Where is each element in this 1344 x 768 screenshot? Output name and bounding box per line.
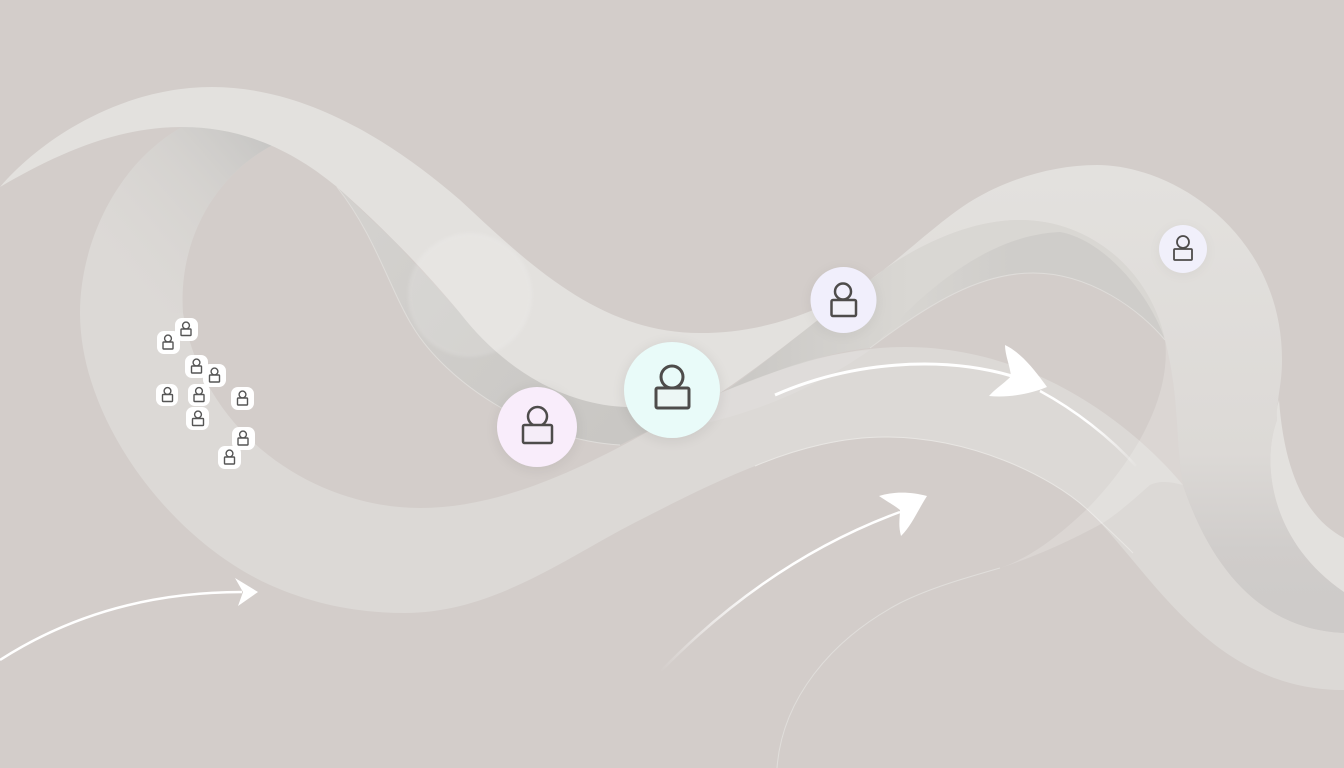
tile 7 [231,387,254,410]
ribbon: right side fold [1270,400,1344,592]
ribbon: lower right wedge with thin outline [777,340,1183,768]
node: small lavender person [1159,225,1207,275]
tile 9 [232,427,255,450]
tile 5 [156,384,178,406]
ribbon: loop from upper left to lower right [80,127,1344,690]
cluster of small person tiles [156,318,255,469]
arrow: upper right with tail continuing [775,345,1136,466]
ribbon: upper sweep, right arc [870,165,1344,633]
tile 8 [186,407,209,430]
tile 1 [175,318,198,341]
tile 2 [157,331,180,354]
node: pink person [497,387,577,469]
node: lavender person [810,267,876,335]
ribbon: back bands behind the right arc [720,220,1165,395]
ribbon: shadow wedge under the upper ribbon [337,187,720,445]
tile 3 [185,355,208,378]
soft orb on the ribbon [408,233,532,357]
tile 6 [188,384,210,406]
tile 4 [203,364,226,387]
tile 10 [218,446,241,469]
ribbon: upper sweep, left section [0,87,870,407]
arrow: centre rising [660,493,927,672]
arrow: lower left [0,578,258,660]
node: mint person [624,342,720,440]
